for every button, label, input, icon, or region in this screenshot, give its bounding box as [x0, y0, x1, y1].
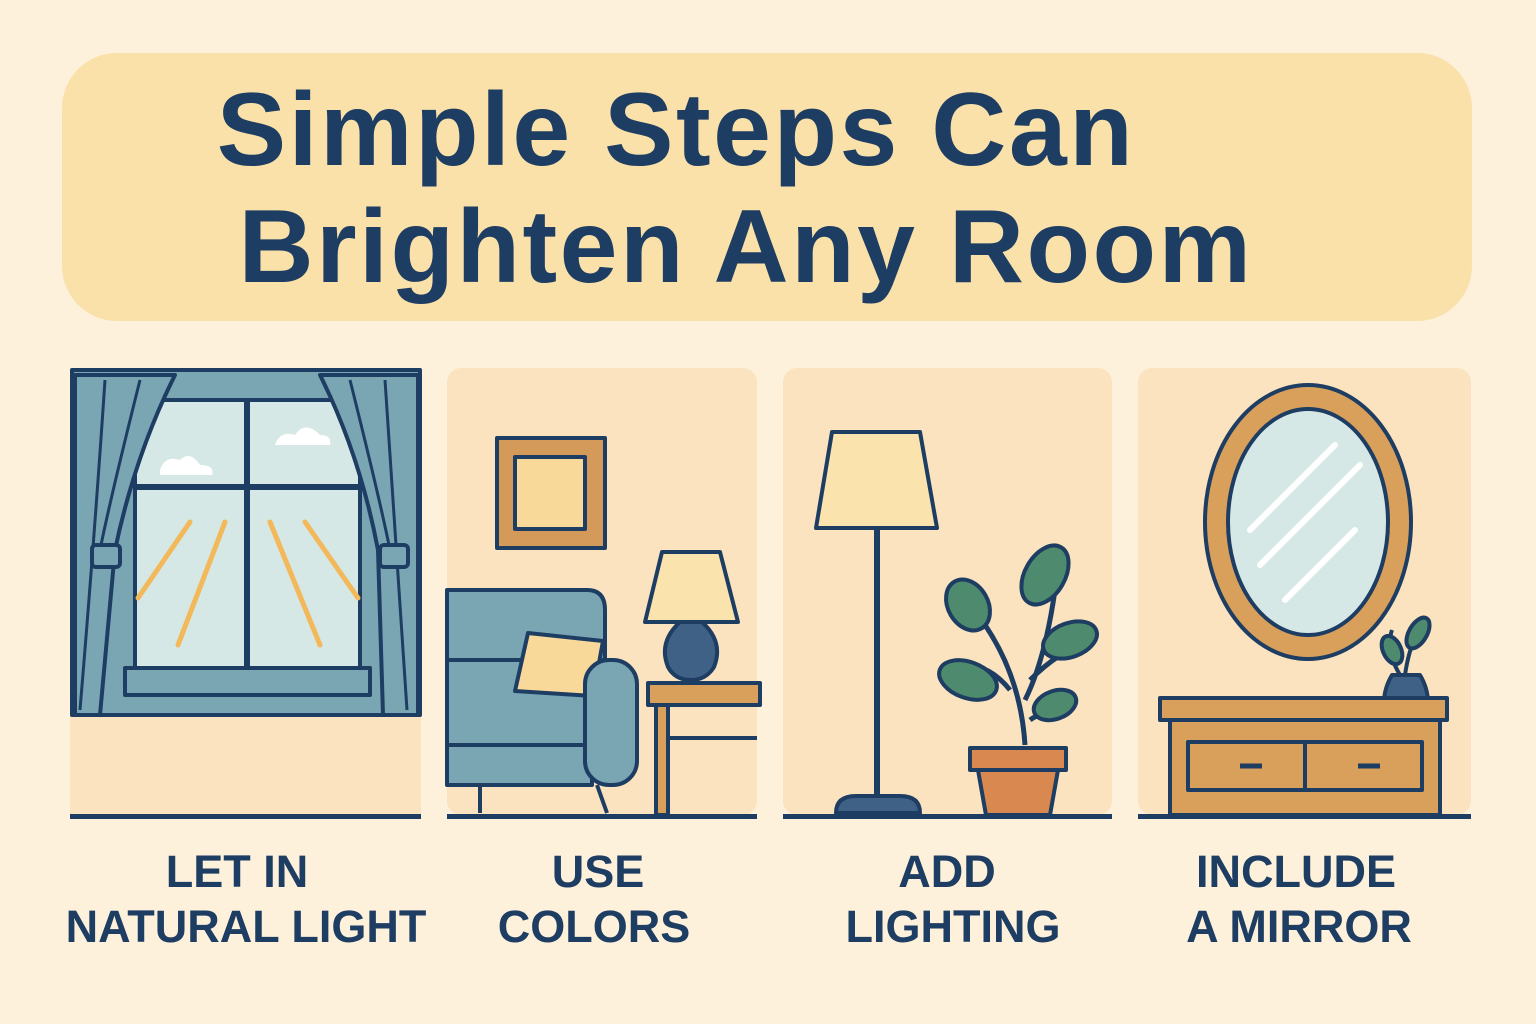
title: Brighten Any Room: [238, 189, 1254, 305]
label: mirror: INCLUDE: [1196, 846, 1396, 897]
panel: colors: [447, 368, 760, 815]
label: mirror: [1186, 846, 1412, 952]
title banner: [62, 53, 1472, 321]
label: natural light: NATURAL LIGHT: [66, 901, 426, 952]
panel: natural light: [70, 368, 421, 815]
label: colors: COLORS: [498, 901, 690, 952]
label: lighting: LIGHTING: [846, 901, 1060, 952]
panel: lighting: [783, 368, 1112, 815]
title: [217, 72, 1254, 305]
label: lighting: [846, 846, 1060, 952]
title: Simple Steps Can: [217, 72, 1135, 188]
panel: mirror: [1138, 368, 1471, 815]
label: colors: [498, 846, 690, 952]
label: lighting: ADD: [898, 846, 996, 897]
floor lines: [70, 814, 1471, 819]
label: natural light: LET IN: [166, 846, 308, 897]
label: mirror: A MIRROR: [1186, 901, 1412, 952]
label: colors: USE: [552, 846, 644, 897]
label: natural light: [66, 846, 426, 952]
